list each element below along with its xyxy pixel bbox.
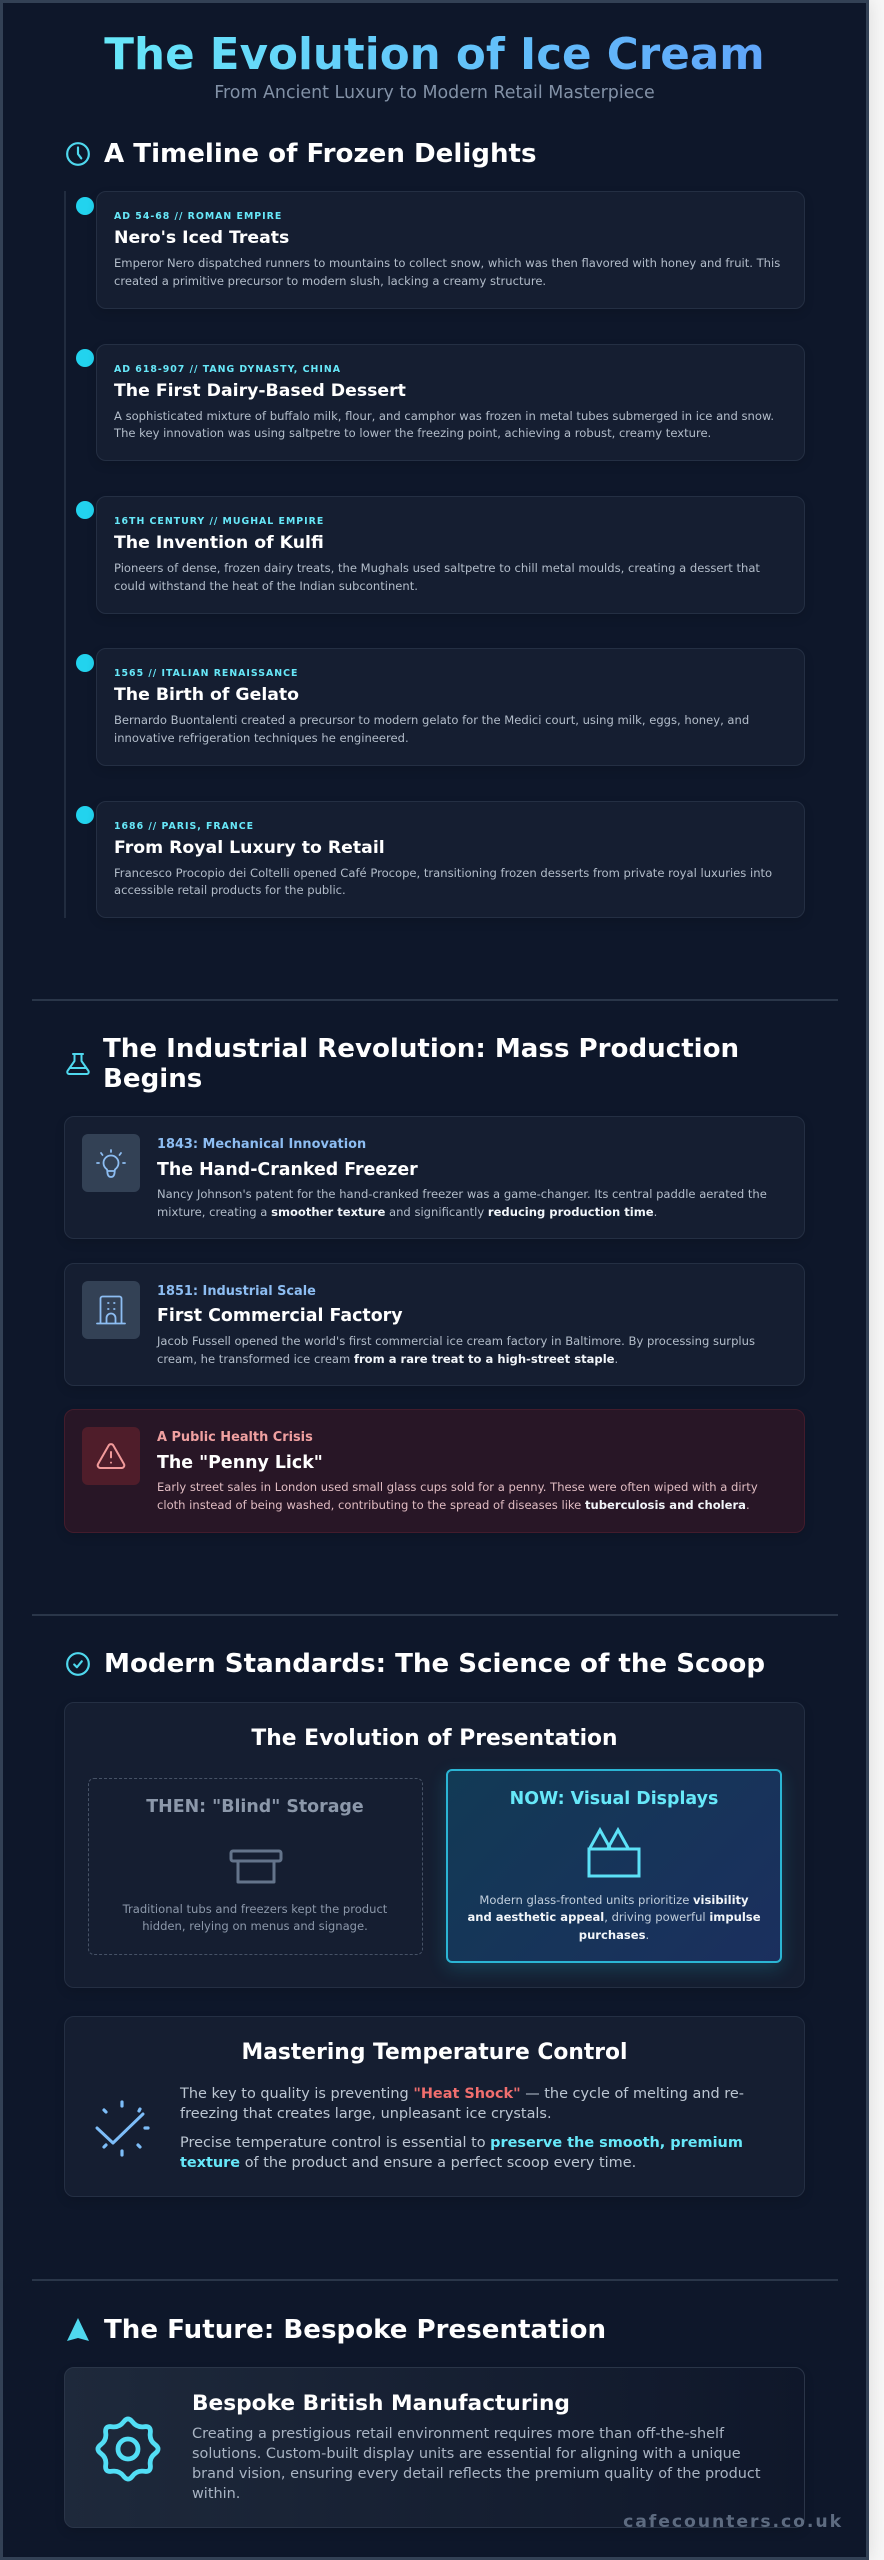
card text: Jacob Fussell opened the world's first commercial ice cream factory in Baltimore. By processing surplus bbox=[157, 1334, 755, 1348]
watermark: cafecounters.co.uk bbox=[623, 2512, 843, 2532]
heading text: Begins bbox=[103, 1064, 202, 1094]
panel title: The Evolution of Presentation bbox=[251, 1726, 618, 1751]
timeline dot 5 bbox=[76, 806, 94, 824]
heading text: A Timeline of Frozen Delights bbox=[104, 139, 537, 169]
card text: accessible retail products for the public. bbox=[114, 883, 346, 897]
card text bbox=[157, 1187, 767, 1219]
then text: hidden, relying on menus and signage. bbox=[142, 1919, 368, 1933]
box: then bbox=[88, 1778, 423, 1955]
card: Nero bbox=[96, 191, 805, 308]
card text: Pioneers of dense, frozen dairy treats, the Mughals used saltpetre to chill metal moulds, creating a dessert that bbox=[114, 561, 760, 575]
heading text bbox=[103, 1034, 739, 1094]
card: Gelato bbox=[96, 648, 805, 766]
subtitle: From Ancient Luxury to Modern Retail Masterpiece bbox=[214, 83, 655, 103]
paragraph: precise control bbox=[180, 2135, 743, 2171]
timeline dot 4 bbox=[76, 654, 94, 672]
panel title: Mastering Temperature Control bbox=[242, 2040, 627, 2065]
then text bbox=[122, 1902, 387, 1933]
card title: The Invention of Kulfi bbox=[114, 533, 324, 553]
card: hand-cranked freezer bbox=[64, 1116, 805, 1239]
card text: The key innovation was using saltpetre to lower the freezing point, achieving a robust, creamy texture. bbox=[114, 426, 711, 440]
heading: timeline bbox=[66, 139, 537, 169]
card title: The First Dairy-Based Dessert bbox=[114, 380, 406, 400]
now text: purchases. bbox=[579, 1928, 649, 1942]
section: modern standards bbox=[64, 1649, 805, 2197]
icon: lightbulb bbox=[82, 1134, 140, 1192]
section: industrial revolution bbox=[64, 1034, 805, 1533]
icon: gear bbox=[96, 2416, 160, 2482]
panel: bespoke manufacturing bbox=[64, 2367, 805, 2528]
heading: modern standards bbox=[66, 1649, 765, 1679]
paragraph: heat shock: freezing that creates large, unpleasant ice crystals. bbox=[180, 2106, 552, 2122]
panel text: solutions. Custom-built display units are essential for aligning with a unique bbox=[192, 2446, 741, 2462]
now text: and aesthetic appeal, driving powerful impulse bbox=[467, 1910, 761, 1924]
now text: Modern glass-fronted units prioritize visibility bbox=[479, 1893, 749, 1907]
icon: warning bbox=[82, 1427, 140, 1485]
icon: temperature check bbox=[95, 2100, 150, 2157]
card text: could withstand the heat of the Indian subcontinent. bbox=[114, 579, 418, 593]
timeline dot 1 bbox=[76, 197, 94, 215]
date label: 1686 // PARIS, FRANCE bbox=[114, 820, 254, 832]
then title: THEN: "Blind" Storage bbox=[146, 1797, 364, 1817]
card text bbox=[114, 561, 760, 593]
card title: The Hand-Cranked Freezer bbox=[157, 1160, 418, 1180]
card text: innovative refrigeration techniques he engineered. bbox=[114, 731, 409, 745]
title: The Evolution of Ice Cream bbox=[104, 30, 765, 80]
panel title: Bespoke British Manufacturing bbox=[192, 2391, 570, 2416]
card text bbox=[157, 1480, 758, 1512]
timeline dot 2 bbox=[76, 348, 94, 366]
heading text: The Industrial Revolution: Mass Production bbox=[103, 1034, 739, 1064]
card text: created a primitive precursor to modern slush, lacking a creamy structure. bbox=[114, 274, 546, 288]
panel: evolution of presentation bbox=[64, 1702, 805, 1988]
card text: mixture, creating a smoother texture and significantly reducing production time. bbox=[157, 1205, 657, 1219]
section: future bbox=[64, 2315, 805, 2528]
card: penny lick bbox=[64, 1409, 805, 1533]
heading text: The Future: Bespoke Presentation bbox=[104, 2315, 606, 2345]
then text: Traditional tubs and freezers kept the product bbox=[123, 1902, 387, 1916]
section: timeline bbox=[64, 139, 805, 918]
date label: 1565 // ITALIAN RENAISSANCE bbox=[114, 668, 298, 679]
timeline dot 3 bbox=[76, 501, 94, 519]
card title: Nero's Iced Treats bbox=[114, 228, 289, 248]
card text: Francesco Procopio dei Coltelli opened Café Procope, transitioning frozen desserts from private royal luxuries into bbox=[114, 866, 772, 880]
card text: Bernardo Buontalenti created a precursor to modern gelato for the Medici court, using milk, eggs, honey, and bbox=[114, 713, 749, 727]
now text bbox=[467, 1893, 761, 1942]
card text bbox=[114, 866, 772, 897]
icon: display case bbox=[588, 1827, 640, 1878]
date label: 16TH CENTURY // MUGHAL EMPIRE bbox=[114, 516, 324, 527]
heading: future bbox=[67, 2315, 606, 2345]
card text: Nancy Johnson's patent for the hand-cranked freezer was a game-changer. Its central paddle aerated the bbox=[157, 1187, 767, 1201]
card text bbox=[114, 256, 780, 288]
card text bbox=[114, 408, 774, 440]
box: now bbox=[446, 1769, 782, 1963]
panel text: within. bbox=[192, 2486, 240, 2502]
now title: NOW: Visual Displays bbox=[510, 1789, 718, 1809]
panel text bbox=[192, 2426, 761, 2502]
card text: Emperor Nero dispatched runners to mountains to collect snow, which was then flavored with honey and fruit. This bbox=[114, 256, 780, 270]
era label: 1851: Industrial Scale bbox=[157, 1284, 316, 1299]
panel text: brand vision, ensuring every detail reflects the premium quality of the product bbox=[192, 2466, 761, 2482]
card text bbox=[114, 713, 749, 745]
card text bbox=[156, 1334, 755, 1366]
card text: cream, he transformed ice cream from a rare treat to a high-street staple. bbox=[157, 1352, 618, 1366]
date label: AD 618-907 // TANG DYNASTY, CHINA bbox=[114, 364, 341, 374]
paragraph: precise control: Precise temperature control is essential to preserve the smooth, premium bbox=[180, 2135, 743, 2151]
card text: cloth instead of being washed, contributing to the spread of diseases like tuberculosis and cholera. bbox=[157, 1498, 750, 1512]
card text: A sophisticated mixture of buffalo milk, flour, and camphor was frozen in metal tubes submerged in ice and snow. bbox=[114, 408, 774, 422]
icon: building bbox=[82, 1281, 140, 1339]
card title: From Royal Luxury to Retail bbox=[114, 838, 385, 858]
paragraph: heat shock: The key to quality is preventing "Heat Shock" — the cycle of melting and re- bbox=[180, 2086, 744, 2102]
card text: Early street sales in London used small glass cups sold for a penny. These were often wiped with a dirty bbox=[157, 1480, 758, 1494]
card: Tang bbox=[96, 344, 805, 461]
panel: temperature control bbox=[64, 2016, 805, 2197]
card title: The "Penny Lick" bbox=[157, 1453, 323, 1473]
timeline line bbox=[64, 191, 66, 918]
paragraph: precise control: texture of the product and ensure a perfect scoop every time. bbox=[180, 2155, 636, 2171]
card title: The Birth of Gelato bbox=[114, 685, 299, 705]
icon: clock bbox=[66, 142, 90, 166]
icon: flask bbox=[66, 1053, 90, 1075]
card: first factory bbox=[64, 1263, 805, 1386]
heading: industrial bbox=[66, 1034, 739, 1094]
panel text: Creating a prestigious retail environment requires more than off-the-shelf bbox=[192, 2426, 724, 2442]
icon: check circle bbox=[66, 1652, 90, 1676]
card title: First Commercial Factory bbox=[157, 1306, 403, 1326]
card: Mughal bbox=[96, 496, 805, 614]
icon: box bbox=[230, 1850, 282, 1884]
date label: AD 54-68 // ROMAN EMPIRE bbox=[114, 211, 282, 222]
paragraph: heat shock bbox=[180, 2086, 744, 2122]
icon: arrow bbox=[67, 2318, 89, 2341]
card: Procope bbox=[96, 800, 805, 918]
temperature text bbox=[180, 2086, 744, 2171]
era label: A Public Health Crisis bbox=[157, 1430, 313, 1445]
heading text: Modern Standards: The Science of the Scoop bbox=[104, 1649, 765, 1679]
era label: 1843: Mechanical Innovation bbox=[157, 1137, 366, 1152]
